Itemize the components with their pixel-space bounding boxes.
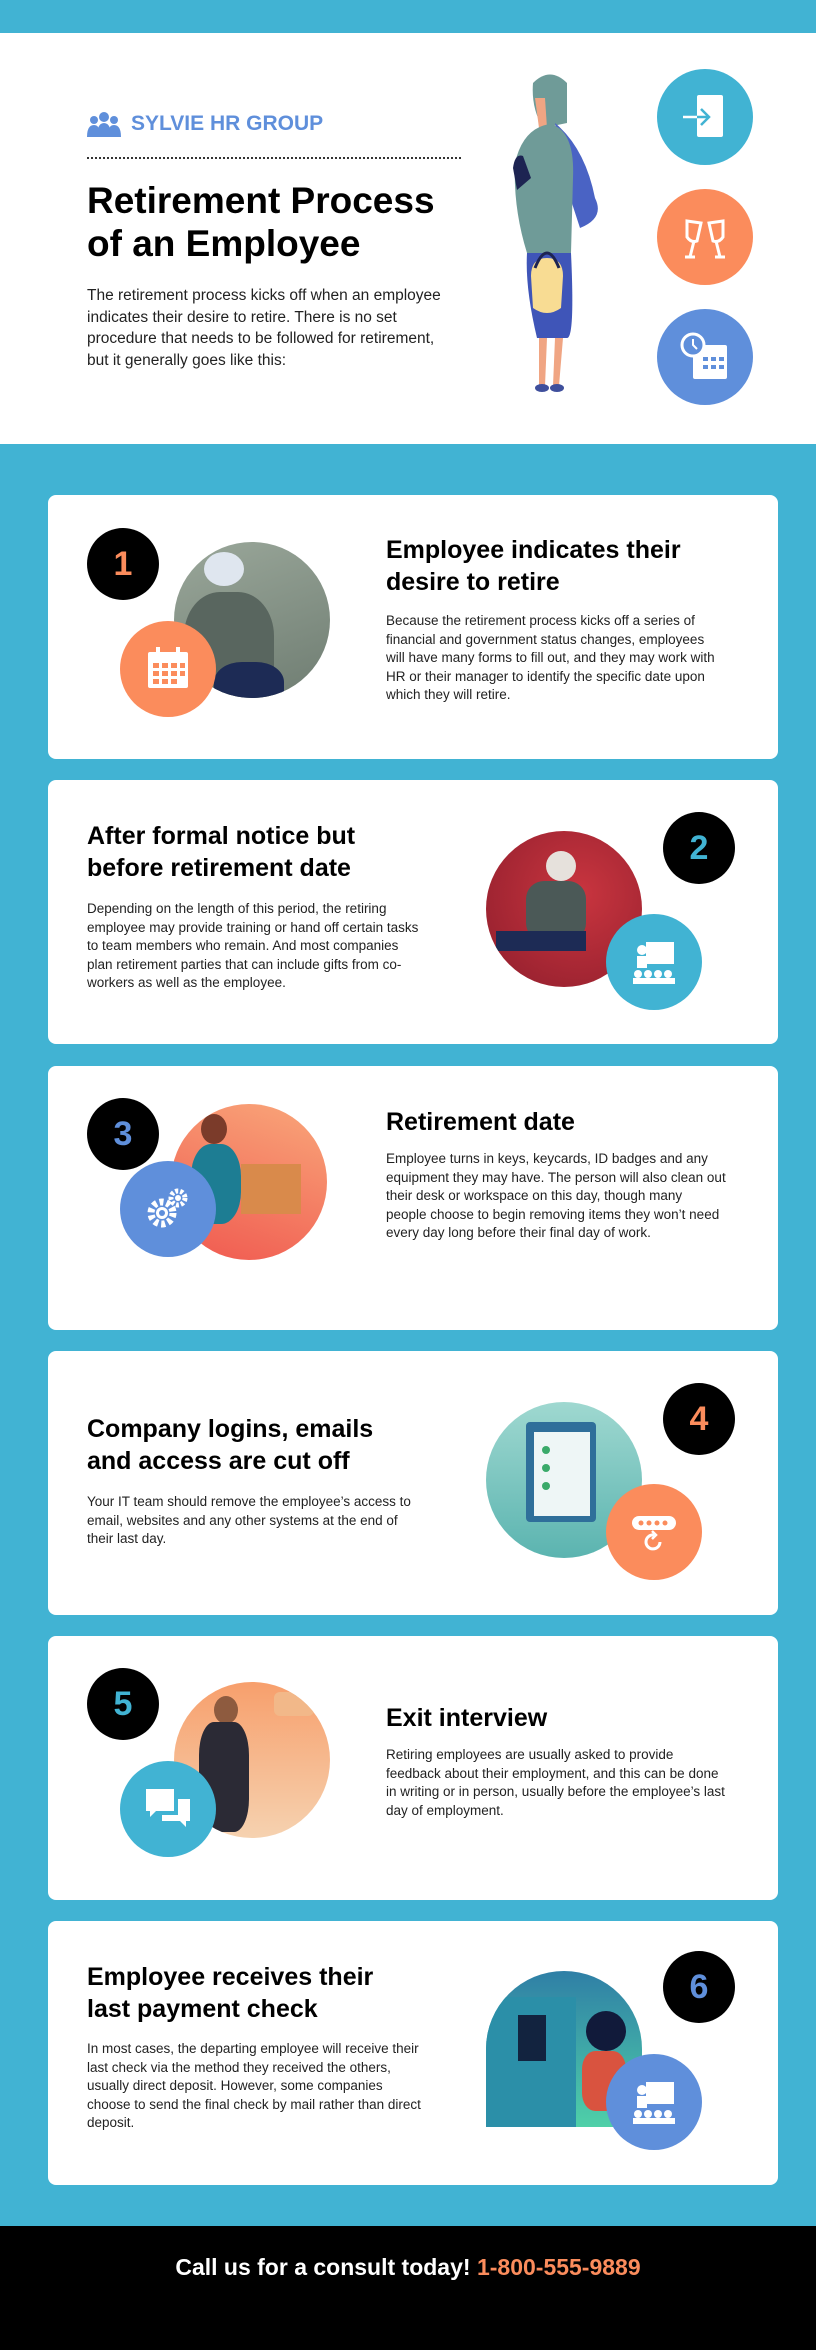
number 2: 2 [690,829,708,867]
body: Employee turns in keys, keycards, ID badges and any equipment they may have. The person will also clean out their desk or workspace on this day, though many people choose to begin removing items they won’t need every day long before their final day of work. [386,1151,726,1240]
body: Depending on the length of this period, the retiring employee may provide training or hand off certain tasks to team members who remain. And most companies plan retirement parties that can include gifts from co-workers as well as the employee. [87,901,418,990]
logo text: SYLVIE HR GROUP [131,112,323,135]
call to action: Call us for a consult today! 1-800-555-9889 [175,2254,641,2280]
number 4: 4 [690,1400,708,1438]
icon circle: calendar [120,621,216,717]
number 2 [663,812,735,884]
footer [0,2226,816,2350]
header white panel [0,33,816,444]
illustration: man reading in chair [486,831,642,987]
heading: After formal notice but before retirement date [87,822,355,882]
card 3 [48,1066,778,1330]
number 1 [87,528,159,600]
icon: people [87,112,121,137]
heading: Employee indicates their desire to retire [386,536,681,596]
card 2 [48,780,778,1044]
number 5 [87,1668,159,1740]
card 4 [48,1351,778,1615]
number 1: 1 [114,545,132,583]
number 4 [663,1383,735,1455]
card 6 [48,1921,778,2185]
intro text: The retirement process kicks off when an employee indicates their desire to retire. There is no set procedure that needs to be followed for retirement, but it generally goes like this: [87,287,441,368]
illustration: man carrying box [171,1104,327,1260]
icon circle: exit door [657,69,753,165]
body: Because the retirement process kicks off a series of financial and government status changes, employees will have many forms to fill out, and they may work with HR or their manager to identify the specific date upon which they will retire. [386,613,715,702]
body: Retiring employees are usually asked to provide feedback about their employment, and this can be done in writing or in person, usually before the employee’s last day of employment. [386,1747,725,1818]
heading: Exit interview [386,1704,547,1732]
icon circle: clock calendar [657,309,753,405]
icon circle: gears [120,1161,216,1257]
body: In most cases, the departing employee will receive their last check via the method they received the others, usually direct deposit. However, some companies choose to send the final check by mail rather than direct deposit. [87,2041,421,2130]
illustration: woman with cat and bag [513,74,598,392]
number 6: 6 [690,1968,708,2006]
card 1 [48,495,778,759]
illustration: ATM [486,1971,642,2127]
number 6 [663,1951,735,2023]
number 3 [87,1098,159,1170]
illustration: older woman waving [174,542,330,698]
heading: Employee receives their last payment check [87,1963,373,2023]
title: Retirement Process [87,180,435,221]
illustration: clipboard checklist [486,1402,642,1558]
logo [87,112,323,137]
icon circle: champagne glasses [657,189,753,285]
title [87,180,435,264]
heading: Company logins, emails and access are cut off [87,1415,373,1475]
body: Your IT team should remove the employee’s access to email, websites and any other systems at the end of their last day. [87,1494,411,1546]
number 3: 3 [114,1115,132,1153]
icon circle: chat bubbles [120,1761,216,1857]
title: of an Employee [87,223,360,264]
icon circle: password reset [606,1484,702,1580]
icon circle: presentation [606,914,702,1010]
illustration: man talking [174,1682,330,1838]
heading: Retirement date [386,1108,575,1136]
icon circle: presentation [606,2054,702,2150]
card 5 [48,1636,778,1900]
number 5: 5 [114,1685,132,1723]
